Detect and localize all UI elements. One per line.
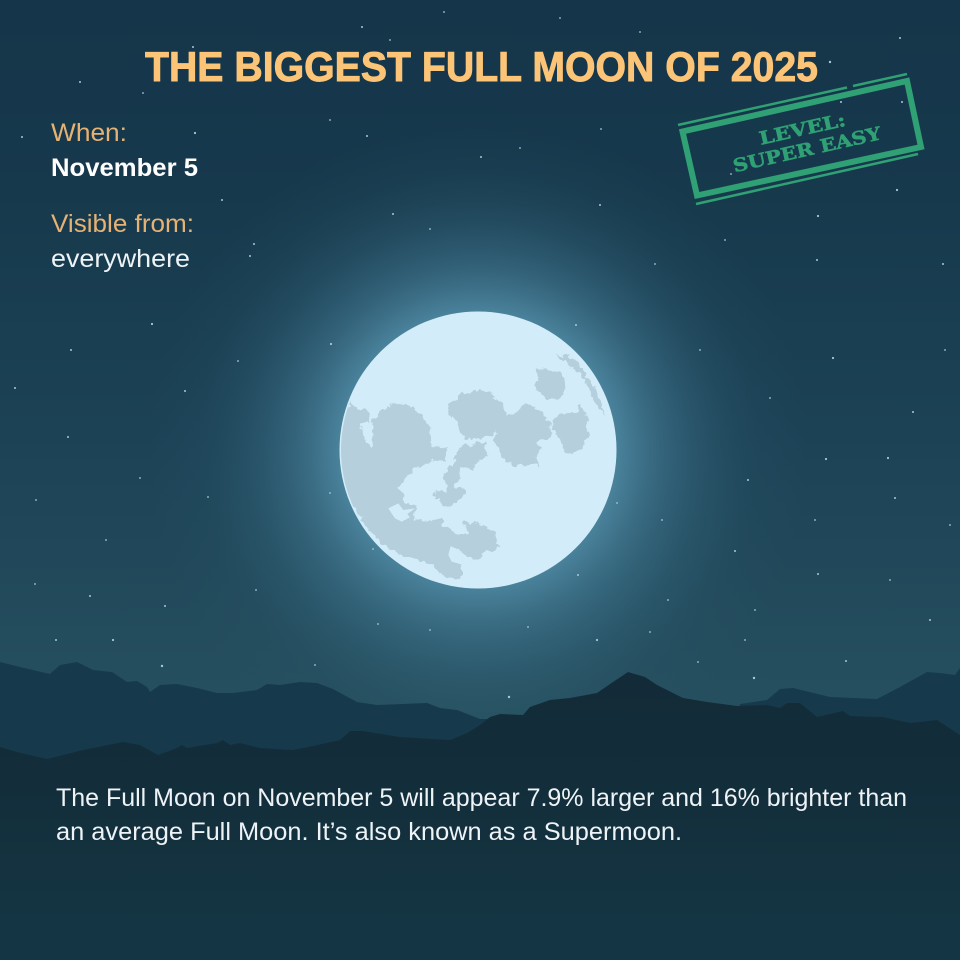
stars (14, 11, 951, 698)
description text: The Full Moon on November 5 will appear 7.9% larger and 16% brighter than (56, 784, 907, 812)
moon disc (340, 312, 616, 588)
visible from label: Visible from: (51, 210, 194, 238)
stamp rules (678, 74, 918, 204)
moon light patches (388, 503, 463, 565)
stamp text: LEVEL: (757, 110, 848, 150)
mountains: near range (0, 672, 960, 960)
visible from value: everywhere (51, 245, 190, 273)
mountains: far range right (740, 668, 960, 800)
stamp text (727, 103, 884, 177)
stamp: level super easy (678, 74, 921, 204)
when value: November 5 (51, 154, 198, 182)
stamp border (682, 81, 921, 196)
description text: an average Full Moon. It’s also known as a Supermoon. (56, 818, 682, 846)
mountains: far range left (0, 662, 520, 800)
stamp text: SUPER EASY (731, 123, 884, 177)
description text (56, 784, 907, 846)
title: THE BIGGEST FULL MOON OF 2025 (145, 43, 818, 90)
moon (337, 312, 616, 588)
moon maria (337, 353, 605, 578)
when label: When: (51, 119, 127, 147)
